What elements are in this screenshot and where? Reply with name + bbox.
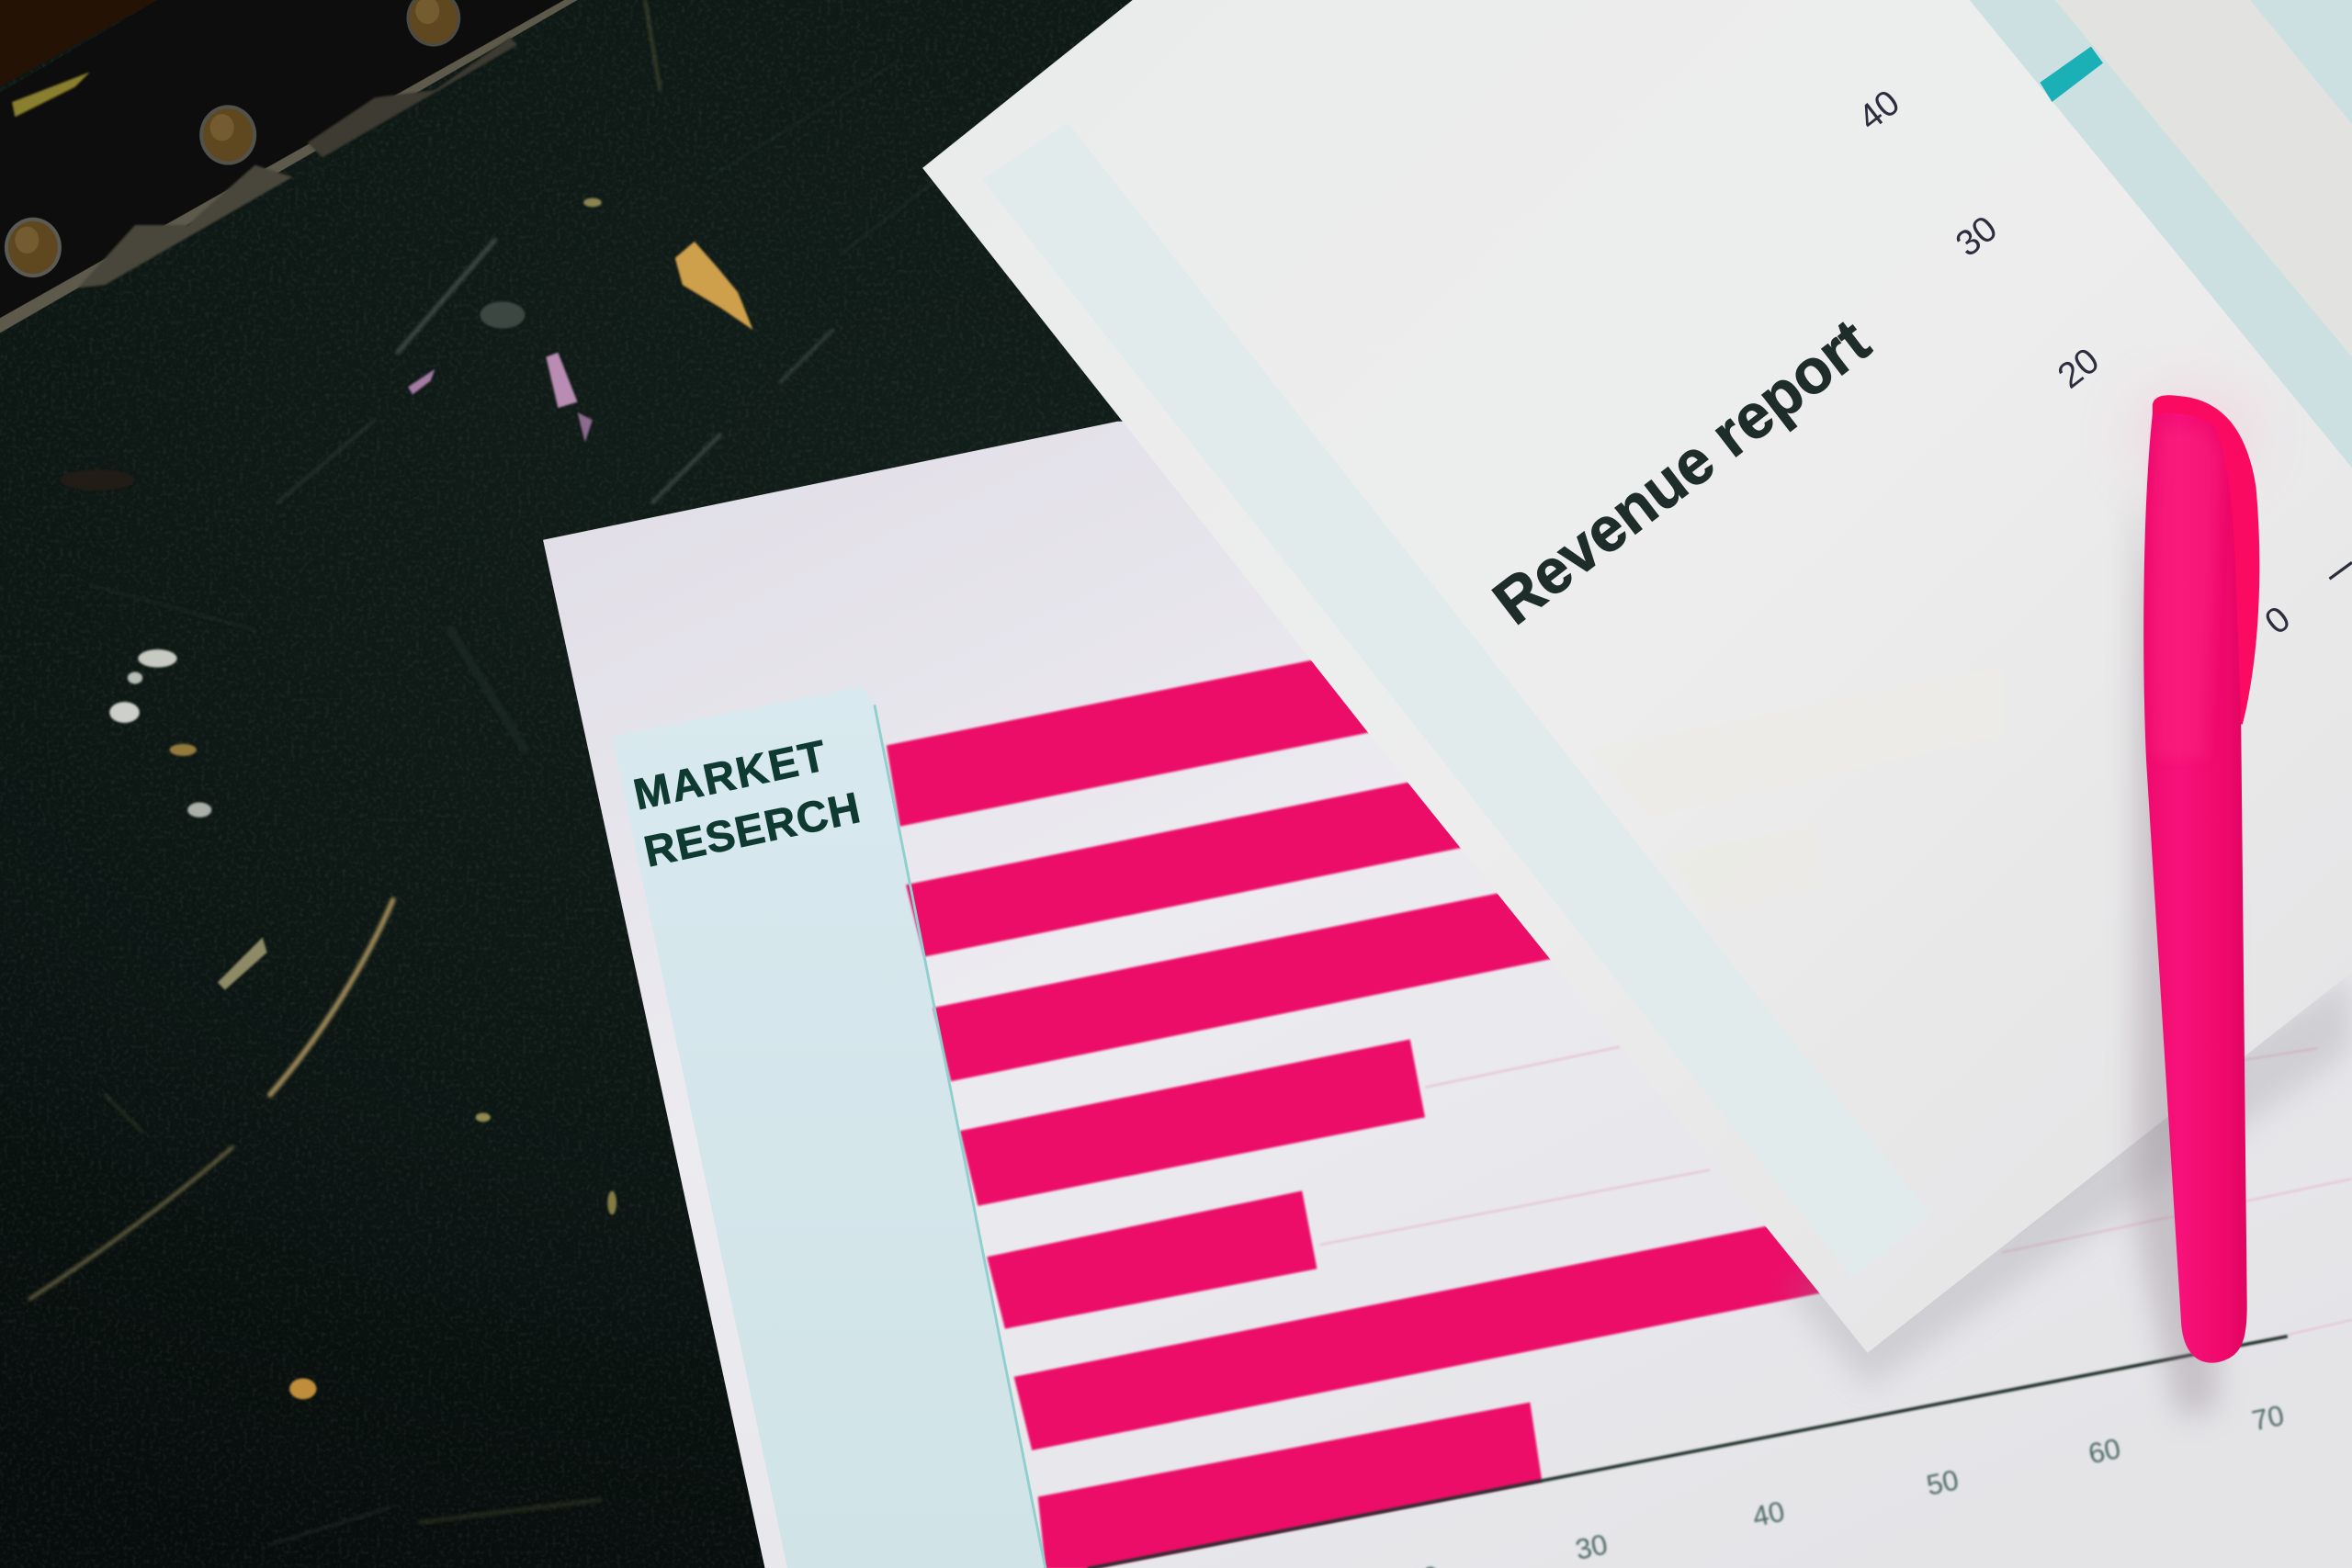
y axis labels (1851, 83, 2298, 642)
y axis labels: 40 (1851, 83, 1907, 139)
panel: revenue report sheet (922, 0, 2352, 1353)
icon: pink highlighter pen (2143, 395, 2259, 1363)
shadow under revenue sheet (1785, 975, 2352, 1387)
y axis labels: 0 (2257, 599, 2298, 642)
heading: revenue report: Revenue report (1480, 306, 1883, 637)
faint ghost bars (1590, 668, 2003, 915)
grid lines (1320, 1047, 2352, 1335)
riveted metal strap (0, 0, 578, 333)
x axis labels: 40 (1749, 1495, 1787, 1533)
x axis labels: 60 (2086, 1432, 2123, 1470)
x axis labels: 30 (1573, 1528, 1611, 1566)
heading: market research (629, 731, 865, 876)
heading: market research: RESERCH (640, 784, 865, 876)
icon: rivet (406, 0, 460, 47)
icon: orange chip (675, 242, 753, 330)
pen shadow (2133, 390, 2253, 1417)
y axis labels: 20 (2051, 341, 2107, 397)
bar chart (887, 637, 1950, 1568)
axis line (875, 705, 1046, 1568)
icon: rivet (5, 218, 62, 277)
y axis labels: 30 (1949, 209, 2005, 265)
pen body (2143, 413, 2247, 1363)
x axis labels: 50 (1924, 1463, 1962, 1502)
teal bar (2040, 47, 2103, 102)
x axis labels (1405, 1399, 2287, 1568)
x axis labels: 70 (2249, 1399, 2287, 1437)
icon: rivet (199, 105, 256, 165)
top right shaded paper (2055, 0, 2352, 357)
pen clip (2153, 395, 2259, 725)
axis tick (2330, 562, 2352, 579)
left pale band (982, 123, 1930, 1278)
top right pale band (1970, 0, 2352, 468)
baseline axis (1088, 1337, 2288, 1568)
heading: market research: MARKET (629, 731, 831, 819)
panel: market research chart sheet (543, 422, 2352, 1568)
